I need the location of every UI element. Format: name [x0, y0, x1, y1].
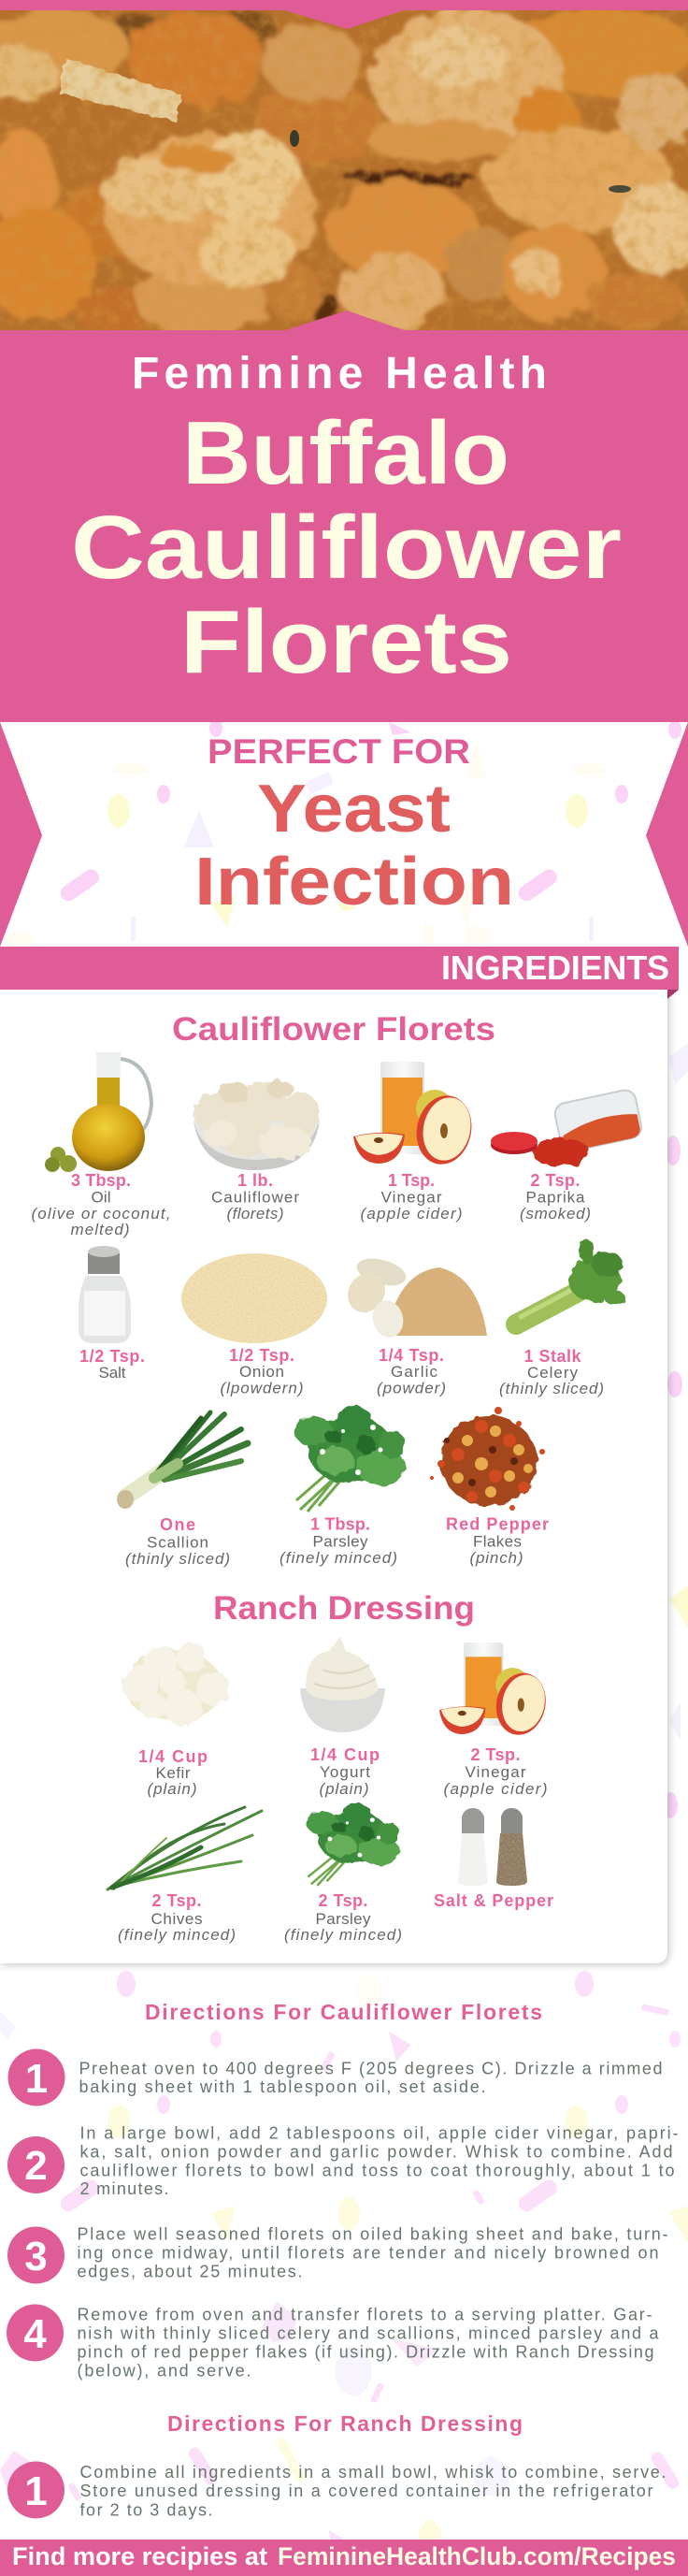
ingredient: salt: 1/2 Tsp.	[79, 1347, 145, 1366]
ingredients card	[0, 990, 667, 1963]
top pink bar with notch	[0, 0, 688, 29]
hero photo of buffalo cauliflower	[0, 0, 688, 335]
step text	[77, 2305, 659, 2380]
ingredient: red pepper flakes: (pinch)	[469, 1549, 523, 1567]
title: Buffalo Cauliflower Florets: Florets	[180, 592, 512, 692]
icon: parsley bunch	[294, 1406, 405, 1512]
footer bar: FeminineHealthClub.com/Recipes	[278, 2542, 676, 2570]
footer bar: Find more recipies at	[12, 2542, 267, 2570]
ingredient: vinegar: 1 Tsp.	[388, 1171, 435, 1190]
icon: apple cider vinegar	[353, 1062, 478, 1169]
step text: pinch of red pepper flakes (if using). Drizzle with Ranch Dressing	[77, 2342, 654, 2361]
ingredient: garlic: 1/4 Tsp.	[379, 1346, 444, 1365]
icon: chives	[108, 1807, 262, 1889]
step 4	[7, 2305, 659, 2380]
ingredient: parsley for dressing: 2 Tsp.	[318, 1891, 368, 1910]
icon: bowl of cauliflower	[194, 1080, 320, 1170]
step 1	[7, 2048, 663, 2106]
ingredient: vinegar for dressing: Vinegar	[466, 1763, 526, 1781]
ingredient: cauliflower: 1 lb.	[237, 1171, 273, 1190]
heading: ranch dressing: Ranch Dressing	[213, 1590, 475, 1627]
step number badge	[7, 2305, 64, 2361]
ingredient: celery: 1 Stalk	[523, 1347, 581, 1366]
step number badge: 2	[24, 2143, 48, 2189]
perfect for label: PERFECT FOR	[208, 732, 470, 771]
ingredient: celery: (thinly sliced)	[499, 1380, 604, 1397]
ingredient: oil: Oil	[92, 1188, 110, 1207]
ingredient: onion powder: (lpowdern)	[221, 1379, 303, 1397]
title banner	[0, 311, 688, 722]
step number badge: 3	[24, 2234, 48, 2279]
ingredient: scallion	[117, 1412, 248, 1568]
ranch step 1	[7, 2462, 666, 2520]
ingredient: oil	[32, 1052, 170, 1238]
icon: parsley bunch	[307, 1803, 399, 1886]
ingredient: salt and pepper: Salt & Pepper	[434, 1891, 553, 1910]
ingredient: chives: 2 Tsp.	[151, 1891, 202, 1910]
step number badge	[7, 2048, 65, 2106]
ingredient: chives: (finely minced)	[118, 1926, 236, 1944]
ingredient: paprika: Paprika	[525, 1188, 585, 1207]
ingredient: kefir: 1/4 Cup	[138, 1747, 208, 1766]
ingredient: salt	[79, 1246, 145, 1382]
ingredient: garlic: Garlic	[391, 1363, 437, 1381]
step text: ing once midway, until florets are tender and nicely browned on	[77, 2243, 658, 2262]
step text: for 2 to 3 days.	[80, 2501, 213, 2520]
heading: directions for ranch dressing: Directions For Ranch Dressing	[167, 2411, 523, 2436]
ribbon: perfect for yeast infection	[0, 722, 688, 947]
step text: cauliflower florets to bowl and toss to coat thoroughly, about 1 to	[80, 2161, 675, 2179]
ingredient: parsley: 1 Tbsp.	[310, 1515, 370, 1534]
ingredient: scallion: (thinly sliced)	[125, 1550, 230, 1568]
ingredient: parsley for dressing: Parsley	[316, 1910, 371, 1928]
ingredient: celery	[499, 1239, 625, 1397]
icon: salt shaker	[79, 1246, 131, 1343]
ingredient: salt and pepper	[434, 1808, 553, 1910]
ingredient: red pepper flakes: Red Pepper	[446, 1515, 549, 1534]
ingredient: kefir: (plain)	[148, 1780, 196, 1798]
ingredient: yogurt	[300, 1637, 385, 1798]
title: Buffalo Cauliflower Florets: Buffalo	[182, 403, 509, 503]
ingredient: celery: Celery	[527, 1364, 578, 1382]
step text: ka, salt, onion powder and garlic powder. Whisk to combine. Add	[80, 2142, 672, 2161]
ingredient: vinegar	[353, 1062, 478, 1223]
step 2	[7, 2123, 679, 2198]
ingredient: oil: (olive or coconut,	[32, 1205, 170, 1223]
icon: onion powder pile	[181, 1253, 327, 1343]
ingredient: red pepper flakes: Flakes	[473, 1532, 522, 1551]
icon: paprika jar and lid	[491, 1088, 643, 1166]
ingredient: yogurt: 1/4 Cup	[310, 1745, 380, 1764]
ingredient: yogurt: (plain)	[320, 1780, 368, 1798]
icon: apple cider vinegar	[439, 1643, 552, 1740]
step text: 2 minutes.	[80, 2179, 168, 2198]
ingredient: salt: Salt	[99, 1364, 126, 1382]
step text: Place well seasoned florets on oiled baking sheet and bake, turn-	[77, 2224, 667, 2243]
icon: celery stalk	[516, 1239, 625, 1324]
ingredient: scallion: Scallion	[147, 1534, 208, 1551]
subtitle: Feminine Health: Feminine Health	[132, 349, 547, 398]
step 3	[7, 2224, 667, 2284]
ingredient: garlic	[340, 1253, 487, 1397]
ingredient: yogurt: Yogurt	[320, 1763, 370, 1781]
ingredient: onion powder: 1/2 Tsp.	[229, 1346, 294, 1365]
ingredient: red pepper flakes	[430, 1407, 549, 1567]
ingredient: kefir: Kefir	[155, 1764, 191, 1782]
ingredient: parsley for dressing	[284, 1803, 402, 1944]
step text: baking sheet with 1 tablespoon oil, set aside.	[79, 2077, 486, 2096]
step text: nish with thinly sliced celery and scallions, minced parsley and a	[77, 2323, 659, 2342]
ingredients header bar: INGREDIENTS	[441, 948, 669, 987]
ingredient: parsley	[280, 1406, 405, 1567]
ingredient: oil: 3 Tbsp.	[71, 1171, 131, 1190]
ingredient: onion powder	[181, 1253, 327, 1397]
ingredient: paprika: 2 Tsp.	[531, 1171, 580, 1190]
step text: (below), and serve.	[77, 2361, 251, 2380]
ingredient: paprika: (smoked)	[520, 1205, 591, 1223]
step text: Store unused dressing in a covered container in the refrigerator	[80, 2482, 653, 2500]
ingredient: parsley: Parsley	[312, 1532, 368, 1551]
background confetti	[0, 718, 688, 2563]
ingredient: vinegar: Vinegar	[381, 1188, 442, 1207]
icon: oil jug	[45, 1052, 151, 1172]
ingredient: chives: Chives	[151, 1910, 202, 1928]
step text: Combine all ingredients in a small bowl, whisk to combine, serve.	[80, 2463, 666, 2482]
ingredient: kefir	[122, 1643, 230, 1798]
step text: In a large bowl, add 2 tablespoons oil, apple cider vinegar, papri-	[80, 2123, 679, 2142]
icon: scallion bunch	[117, 1412, 248, 1509]
title: Buffalo Cauliflower Florets: Cauliflower	[71, 498, 622, 598]
ingredient: vinegar for dressing	[439, 1643, 552, 1798]
step text: edges, about 25 minutes.	[77, 2262, 303, 2280]
footer bar	[0, 2540, 688, 2576]
condition name: Yeast	[257, 772, 451, 847]
step text: Remove from oven and transfer florets to a serving platter. Gar-	[77, 2305, 652, 2323]
step number badge: 4	[23, 2311, 47, 2357]
ingredients header bar	[0, 947, 679, 999]
ingredient: parsley for dressing: (finely minced)	[284, 1926, 402, 1944]
step number badge: 1	[24, 2468, 48, 2514]
icon: salt and pepper shakers	[458, 1808, 527, 1886]
ingredient: vinegar for dressing: 2 Tsp.	[471, 1745, 520, 1764]
ingredient: vinegar for dressing: (apple cider)	[443, 1780, 548, 1798]
ingredient: parsley: (finely minced)	[280, 1549, 397, 1567]
step text	[77, 2224, 667, 2280]
icon: kefir grains	[122, 1643, 230, 1726]
icon: yogurt bowl	[300, 1637, 385, 1732]
step number badge	[7, 2226, 64, 2284]
ingredient: vinegar: (apple cider)	[361, 1205, 462, 1223]
ingredient: paprika	[491, 1088, 643, 1223]
ingredient: oil: melted)	[71, 1221, 129, 1238]
heading: directions for cauliflower florets: Directions For Cauliflower Florets	[145, 2000, 542, 2024]
step text	[80, 2463, 666, 2520]
step text	[79, 2060, 663, 2096]
step text	[80, 2123, 679, 2198]
icon: red pepper flakes	[430, 1407, 545, 1511]
ingredient: onion powder: Onion	[239, 1363, 284, 1381]
step number badge	[7, 2462, 64, 2518]
step text: Preheat oven to 400 degrees F (205 degrees C). Drizzle a rimmed	[79, 2060, 663, 2078]
ingredient: garlic: (powder)	[377, 1379, 446, 1397]
ingredient: scallion: One	[160, 1515, 195, 1534]
heading: cauliflower florets: Cauliflower Florets	[172, 1011, 495, 1048]
ingredient: cauliflower	[194, 1080, 320, 1223]
ingredient: chives	[108, 1807, 262, 1944]
step number badge	[7, 2136, 64, 2193]
icon: garlic and powder	[340, 1253, 487, 1340]
title: Buffalo Cauliflower Florets	[71, 403, 622, 692]
condition name	[194, 772, 514, 919]
ingredient: cauliflower: Cauliflower	[211, 1188, 299, 1207]
condition name: Infection	[194, 845, 514, 919]
step number badge: 1	[25, 2056, 48, 2102]
ingredient: cauliflower: (florets)	[226, 1205, 284, 1223]
